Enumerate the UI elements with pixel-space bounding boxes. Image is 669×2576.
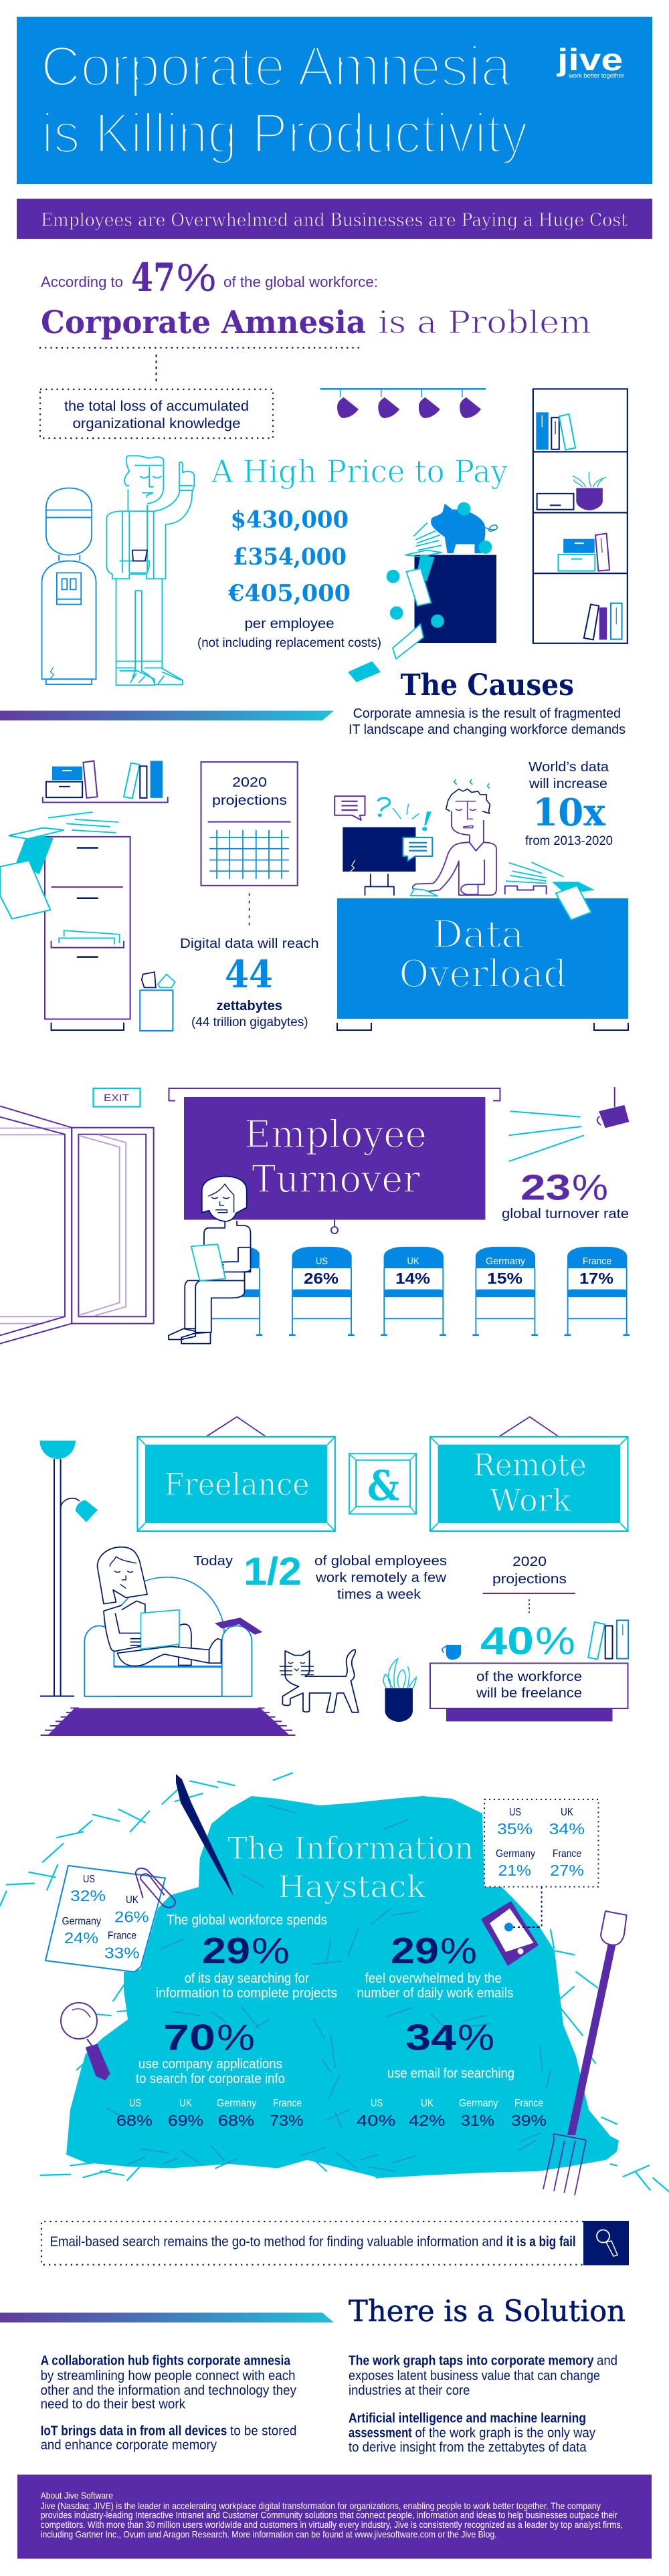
table: email by country: Germany: [459, 2098, 498, 2109]
solution text: right column: industries at their core: [349, 2383, 470, 2398]
stat: 44 zettabytes: zettabytes: [217, 999, 282, 1013]
subtitle bar: Employees are Overwhelmed and Businesses are Paying a Huge Cost: [41, 210, 628, 231]
chair: France: 17%: [579, 1270, 613, 1287]
stat: 23% turnover: 23: [520, 1168, 571, 1208]
stat: 70% use company applications: %: [217, 2017, 255, 2058]
stat: 23% turnover: %: [572, 1168, 608, 1208]
heading: corporate amnesia is a problem: is a Problem: [378, 304, 591, 341]
definition callout: [39, 348, 363, 438]
subtitle bar: [17, 199, 652, 239]
panel: data overload desk: [337, 882, 628, 1030]
jive logo: jive: [557, 42, 623, 77]
chair: France: [565, 1247, 630, 1335]
illustration: piggy bank on pedestal: [348, 502, 497, 682]
icon: pitchfork: [543, 1911, 627, 2195]
illustration: cat: [280, 1650, 359, 1712]
illustration: woman sitting: [169, 1177, 251, 1344]
table: email by country: [357, 2098, 547, 2129]
heading: corporate amnesia is a problem: Corporate Amnesia: [41, 304, 366, 341]
straw texture: [107, 1805, 585, 2141]
callout: percentages by country: France: [553, 1848, 581, 1860]
definition callout: the total loss of accumulated: [64, 399, 249, 414]
intro statistic: 47%: 47: [131, 255, 175, 300]
heading: a high price to pay: A High Price to Pay: [211, 454, 508, 490]
stat: 44 zettabytes: [180, 936, 319, 1029]
chair: France: France: [583, 1256, 611, 1267]
intro statistic: 47%: [41, 255, 378, 300]
note: percentages by country: 32%: [70, 1887, 106, 1904]
icon: phone: [481, 1901, 541, 1966]
panel: data overload desk: Overload: [399, 953, 567, 996]
footer: about jive software: including Gartner Inc., Ovum and Aragon Research. More information can be found at www.jivesoftware.com or the Jive Blog.: [41, 2529, 497, 2540]
cost figures: £354,000: [233, 543, 347, 571]
gradient divider: [0, 2312, 334, 2322]
illustration: rug: [41, 1708, 295, 1736]
table: email by country: US: [371, 2098, 383, 2109]
callout: percentages by country: 21%: [498, 1862, 531, 1879]
exit sign: [94, 1088, 140, 1106]
illustration: open door: [0, 1106, 154, 1344]
note: percentages by country: Germany: [62, 1916, 101, 1927]
causes description: Corporate amnesia is the result of fragmented: [353, 706, 621, 721]
illustration: waste bin: [140, 972, 175, 1031]
cost figures: $430,000: [230, 506, 349, 534]
calendar: 2020 projections: 2020: [232, 775, 267, 790]
stat: world's data 10x: World’s data: [529, 760, 609, 775]
stat: 29% of day searching: %: [252, 1930, 290, 1971]
chair: UK: [381, 1247, 446, 1335]
callout: percentages by country: Germany: [496, 1848, 535, 1860]
stat: half of employees: [193, 1550, 447, 1602]
solution text: right column: assessment: [349, 2425, 412, 2440]
panel: employee turnover screen: Turnover: [252, 1158, 420, 1201]
stat: 2020 projections 40%: projections: [492, 1572, 567, 1587]
stat: 44 zettabytes: (44 trillion gigabytes): [191, 1015, 308, 1029]
note: percentages by country: UK: [126, 1894, 138, 1906]
illustration: cup and books on cabinet: [442, 1620, 628, 1660]
heading: the information haystack: [227, 1830, 474, 1905]
callout: percentages by country: UK: [561, 1807, 573, 1818]
stat: 29% of day searching: information to complete projects: [156, 1986, 337, 2001]
note: percentages by country: France: [108, 1930, 136, 1941]
chair: US: 26%: [304, 1270, 339, 1287]
header banner: [17, 17, 652, 184]
solution text: right column: of the work graph is the only way: [415, 2425, 595, 2440]
chair: Germany: [472, 1247, 538, 1335]
stat: 70% use company applications: to search for corporate info: [136, 2072, 285, 2086]
table: company applications by country: 68%: [218, 2112, 254, 2129]
icon: paperclip: [136, 1868, 175, 1908]
table: company applications by country: US: [129, 2098, 141, 2109]
solution text: left column: to be stored: [230, 2424, 296, 2439]
heading: there is a solution: There is a Solution: [349, 2294, 626, 2329]
title: Corporate Amnesia: [41, 35, 511, 98]
solution text: right column: and: [597, 2353, 617, 2368]
track lights: [320, 389, 486, 418]
table: company applications by country: 69%: [168, 2112, 203, 2129]
table: email by country: 39%: [511, 2112, 547, 2129]
illustration: woman reading in armchair: [84, 1547, 262, 1696]
cost figures: per employee: [245, 616, 334, 631]
solution text: right column: The work graph taps into corporate memory: [349, 2353, 594, 2368]
stat: 23% turnover: [502, 1168, 629, 1221]
solution text: left column: A collaboration hub fights corporate amnesia: [41, 2353, 291, 2368]
icon: magnifying glass: [61, 2003, 110, 2080]
heading: the causes: The Causes: [400, 668, 574, 702]
gradient divider: [0, 710, 334, 720]
flying paper: [552, 882, 595, 920]
stat: 29% overwhelmed by email: [357, 1930, 513, 2001]
solution text: left column: need to do their best work: [41, 2397, 186, 2412]
solution text: left column: other and the information and technology they: [41, 2383, 296, 2398]
heading: corporate amnesia is a problem: [41, 304, 591, 341]
illustration: man at water cooler: [107, 456, 194, 685]
illustration: floor lamp: [39, 1441, 98, 1696]
exit sign: EXIT: [104, 1092, 129, 1104]
illustration: projector: [508, 1087, 629, 1161]
straw scattered outside haystack: [0, 1773, 617, 2124]
table: company applications by country: 68%: [116, 2112, 153, 2129]
note: percentages by country: 33%: [104, 1944, 140, 1961]
stat: half of employees: of global employees: [314, 1554, 447, 1569]
stat: half of employees: work remotely a few: [315, 1571, 447, 1585]
stat: half of employees: times a week: [337, 1587, 421, 1602]
solution text: right column: to derive insight from the zettabytes of data: [349, 2440, 587, 2455]
cabinet: 40% of the workforce: will be freelance: [476, 1686, 582, 1701]
stat: 29% overwhelmed by email: 29: [391, 1930, 439, 1971]
stat: half of employees: Today: [193, 1554, 233, 1569]
chair hidden behind woman: [201, 1247, 262, 1335]
callout: percentages by country: 35%: [497, 1820, 533, 1838]
title: [41, 35, 528, 165]
chair: UK: 14%: [395, 1270, 430, 1287]
table: email by country: 42%: [409, 2112, 445, 2129]
picture frame: freelance: [137, 1417, 335, 1531]
stat: 70% use company applications: [136, 2017, 285, 2086]
stat: half of employees: 1/2: [244, 1550, 302, 1593]
footer: about jive software: Jive (Nasdaq: JIVE) is the leader in accelerating workplace digital transformation for organizations, enabling people to work better together. The company: [41, 2500, 601, 2511]
icon: needle: [176, 1774, 234, 1897]
intro statistic: 47%: %: [177, 256, 216, 300]
table: email by country: 31%: [461, 2112, 494, 2129]
stat: 29% overwhelmed by email: feel overwhelmed by the: [365, 1971, 502, 1986]
solution text: left column: IoT brings data in from all devices: [41, 2424, 227, 2439]
definition callout: organizational knowledge: [72, 416, 241, 431]
note: percentages by country: [45, 1866, 175, 1972]
note: percentages by country: 24%: [64, 1929, 98, 1947]
panel: information haystack: [41, 1796, 669, 2192]
callout: percentages by country: 34%: [549, 1820, 585, 1838]
cost figures: [197, 506, 381, 650]
solution text: right column: Artificial intelligence and machine learning: [349, 2411, 586, 2425]
illustration: water cooler: [42, 488, 96, 684]
stat: 2020 projections 40%: %: [535, 1619, 575, 1663]
table: email by country: France: [514, 2098, 543, 2109]
footer: about jive software: [17, 2475, 652, 2559]
table: company applications by country: [116, 2098, 304, 2129]
intro statistic: 47%: According to: [41, 274, 123, 290]
stat: 44 zettabytes: Digital data will reach: [180, 936, 319, 951]
callout: percentages by country: US: [509, 1807, 521, 1818]
table: email by country: 40%: [357, 2112, 395, 2129]
illustration: wall shelf: [43, 761, 168, 802]
bookshelf: [533, 389, 628, 643]
stat: 29% of day searching: of its day searching for: [185, 1971, 309, 1986]
callout: percentages by country: 27%: [550, 1862, 584, 1879]
stat: 2020 projections 40%: [480, 1555, 575, 1663]
callout: percentages by country: [484, 1799, 598, 1927]
picture frame: remote work: Work: [490, 1482, 572, 1518]
stat: 70% use company applications: 70: [163, 2017, 215, 2058]
stat: 34% use email: 34: [405, 2017, 456, 2058]
picture frame: ampersand: &: [367, 1461, 399, 1510]
calendar: 2020 projections: projections: [212, 793, 287, 808]
table: company applications by country: 73%: [270, 2112, 304, 2129]
chair: UK: UK: [407, 1256, 419, 1267]
causes description: IT landscape and changing workforce demands: [349, 722, 626, 737]
note: percentages by country: 26%: [114, 1908, 149, 1926]
icon: search: [583, 2221, 629, 2265]
stat: 34% use email: use email for searching: [387, 2066, 514, 2081]
table: email by country: UK: [421, 2098, 434, 2109]
illustration: overloaded worker at desk: [334, 779, 563, 896]
heading: the information haystack: The Information: [227, 1830, 474, 1866]
intro statistic: 47%: of the global workforce:: [223, 274, 378, 290]
illustration: potted plant: [383, 1659, 416, 1722]
illustration: file cabinet: [0, 812, 130, 1030]
causes description: [349, 706, 626, 737]
panel: employee turnover screen: [169, 1088, 500, 1233]
cabinet: 40% of the workforce: [430, 1663, 628, 1721]
straw scattered: base: [41, 2156, 669, 2192]
panel: employee turnover screen: Employee: [244, 1113, 427, 1157]
straw texture: base: [128, 2141, 536, 2171]
stat: 29% overwhelmed by email: number of daily work emails: [357, 1986, 513, 2001]
picture frame: ampersand: [349, 1454, 416, 1514]
chair: US: US: [316, 1256, 328, 1267]
panel: data overload desk: Data: [432, 913, 524, 957]
title: is Killing Productivity: [41, 102, 528, 165]
picture frame: remote work: [430, 1417, 628, 1531]
table: company applications by country: Germany: [217, 2098, 256, 2109]
stat: 2020 projections 40%: 2020: [512, 1555, 547, 1569]
table: company applications by country: France: [273, 2098, 302, 2109]
solution text: left column: by streamlining how people connect with each: [41, 2369, 295, 2383]
jive logo: work better together: [568, 72, 624, 80]
callout: email-based search: Email-based search remains the go-to method for finding valuable information and: [50, 2234, 503, 2250]
solution text: left column: and enhance corporate memory: [41, 2438, 217, 2453]
stat: 29% overwhelmed by email: %: [440, 1930, 477, 1971]
stat: 44 zettabytes: 44: [225, 953, 273, 997]
stat: 70% use company applications: use company applications: [138, 2057, 282, 2072]
stat: 29% of day searching: 29: [202, 1930, 250, 1971]
cost figures: (not including replacement costs): [197, 636, 381, 650]
stat: world's data 10x: will increase: [529, 777, 607, 791]
heading: the information haystack: Haystack: [278, 1869, 426, 1905]
calendar: 2020 projections: [201, 762, 298, 929]
solution text: left column: [41, 2353, 296, 2453]
chair: US: [289, 1247, 355, 1335]
cost figures: €405,000: [227, 579, 351, 607]
stat: 34% use email: [387, 2017, 514, 2081]
stat: 34% use email: %: [458, 2017, 494, 2058]
stat: world's data 10x: from 2013-2020: [525, 834, 613, 848]
stat: 29% of day searching: [156, 1912, 337, 2001]
stat: 23% turnover: global turnover rate: [502, 1207, 629, 1221]
picture frame: freelance: Freelance: [165, 1466, 310, 1502]
note: percentages by country: US: [83, 1874, 95, 1885]
stat: 29% of day searching: The global workforce spends: [167, 1912, 327, 1928]
callout: email-based search: it is a big fail: [506, 2234, 576, 2250]
chair: Germany: Germany: [486, 1256, 525, 1267]
stat: 2020 projections 40%: 40: [480, 1619, 534, 1663]
stat: world's data 10x: 10x: [533, 791, 606, 835]
chair: Germany: 15%: [487, 1270, 522, 1287]
picture frame: remote work: Remote: [473, 1447, 587, 1483]
cabinet: 40% of the workforce: of the workforce: [476, 1670, 582, 1684]
solution text: right column: [349, 2353, 617, 2455]
callout: email-based search: [41, 2221, 629, 2265]
footer: about jive software: About Jive Software: [41, 2490, 113, 2501]
table: company applications by country: UK: [179, 2098, 192, 2109]
stat: world's data 10x: [525, 760, 613, 848]
solution text: right column: exposes latent business value that can change: [349, 2369, 600, 2383]
